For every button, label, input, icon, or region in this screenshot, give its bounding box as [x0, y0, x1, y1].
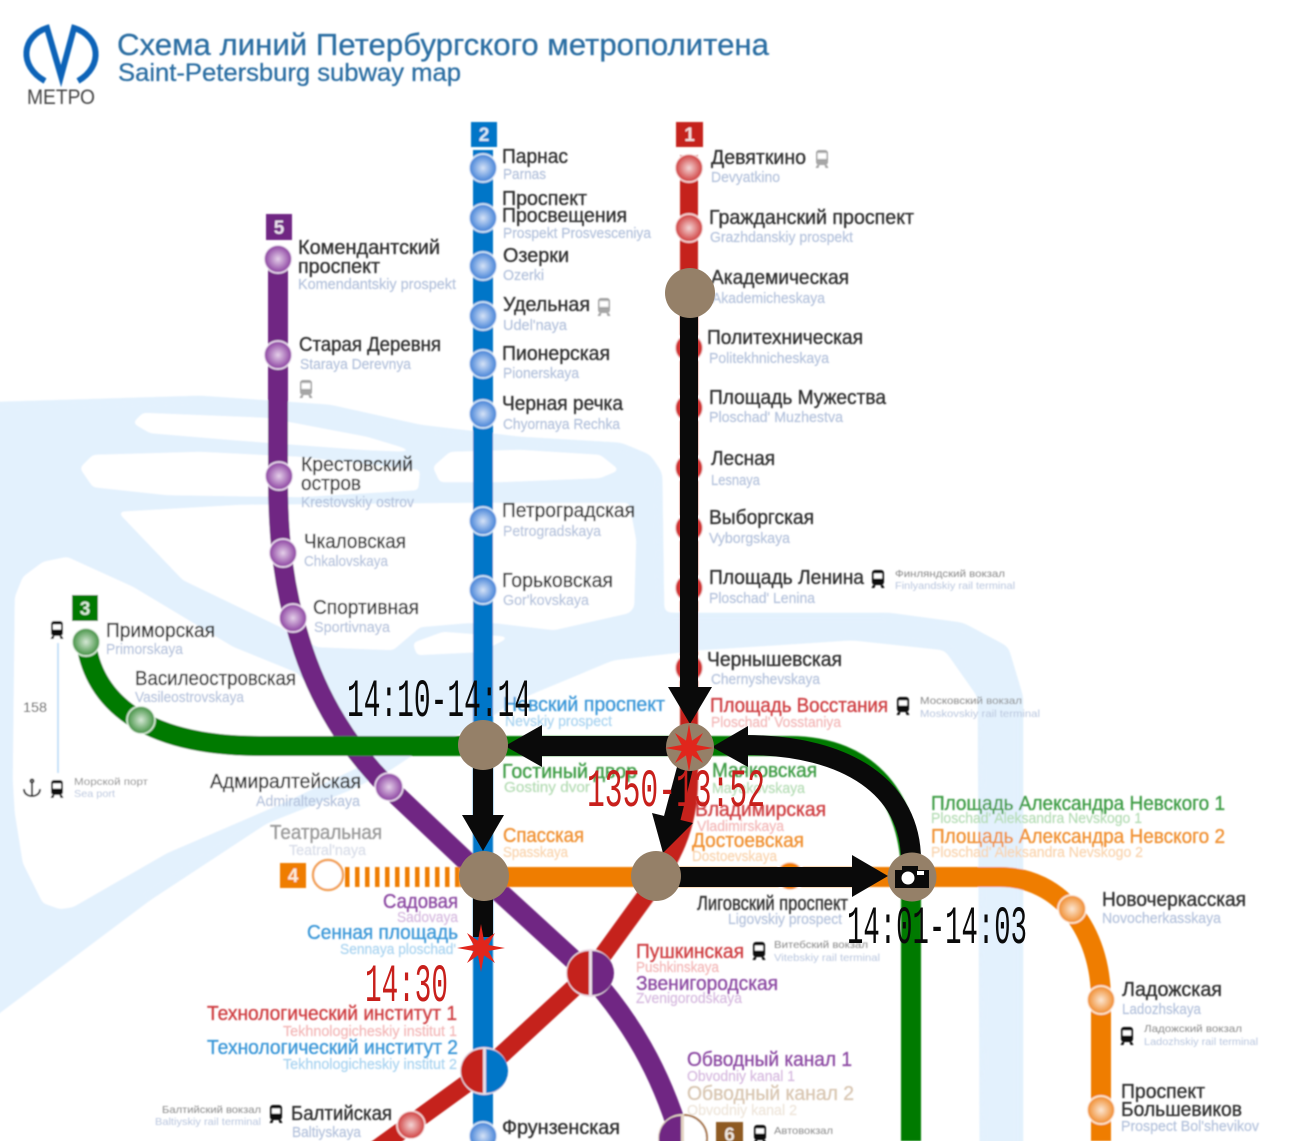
line 5 purple	[278, 258, 680, 1137]
sea port link	[57, 643, 59, 773]
island: thin lens	[133, 413, 417, 452]
Teatralnaya ring	[313, 860, 343, 890]
island: right of line 2	[433, 450, 619, 482]
label: Obvodny kanal 1	[687, 1049, 852, 1085]
label: Tekhnologichesky institut 1: Tekhnologicheskiy institut 1	[283, 1023, 457, 1040]
label: Pushkinskaya: Пушкинская	[636, 941, 744, 963]
label: Grazhdansky prospekt: Grazhdanskiy prospekt	[710, 229, 854, 246]
subtitle: Saint-Petersburg subway map	[118, 59, 461, 87]
label: Krestovsky ostrov: остров	[301, 473, 361, 495]
label: Baltic rail terminal: Baltiyskiy rail terminal	[155, 1116, 261, 1128]
label: Sennaya ploshchad: Sennaya ploschad'	[340, 941, 456, 958]
label: Lesnaya: Лесная	[711, 448, 775, 470]
star: Sennaya incident	[457, 924, 505, 972]
label: Novocherkasskaya	[1102, 889, 1246, 927]
label: Devyatkino	[711, 147, 806, 186]
badge 3: 3	[80, 599, 90, 620]
label: Dostoevskaya: Достоевская	[692, 830, 804, 852]
island: Krestovsky	[80, 452, 420, 497]
label: Sportivnaya: Sportivnaya	[314, 619, 391, 636]
label: Vitebsk rail terminal: Vitebskiy rail terminal	[774, 952, 880, 964]
label: Udelnaya	[503, 294, 590, 334]
label: Teatralnaya: Театральная	[270, 822, 382, 844]
line 1 stations under route	[675, 334, 703, 682]
label: Pushkinskaya: Pushkinskaya	[636, 959, 720, 976]
label: Mayakovskaya: Маяковская	[712, 760, 817, 782]
label: Staraya Derevnya: Staraya Derevnya	[300, 356, 412, 373]
label: Parnas: Parnas	[503, 166, 546, 183]
label: Vyborgskaya: Vyborgskaya	[709, 530, 791, 547]
icon: Finland station	[872, 570, 884, 588]
label: Prospekt Prosvescheniya: Проспект	[502, 188, 587, 210]
Ligovsky station	[776, 862, 804, 890]
label: Admiralteyskaya: Admiralteyskaya	[256, 793, 361, 810]
badge 6	[716, 1122, 743, 1141]
islands	[13, 413, 636, 909]
route overlay	[347, 268, 1027, 1018]
label: Sadovaya: Садовая	[383, 891, 458, 913]
interchange: Obvodny kanal	[658, 1114, 707, 1141]
label: Sennaya ploshchad: Сенная площадь	[307, 922, 458, 944]
logo mark	[26, 28, 96, 81]
label: Politekhnicheskaya: Политехническая	[707, 327, 863, 349]
icon: Staraya Derevnya rail	[300, 380, 312, 398]
label: Mayakovskaya	[712, 760, 817, 797]
arrow: Dostoevskaya to Aleksandra Nevskogo	[657, 855, 888, 897]
badge 2	[471, 122, 497, 147]
label: Devyatkino: Devyatkino	[711, 169, 780, 186]
label: Lesnaya	[711, 448, 775, 489]
star: Vosstaniya incident	[665, 724, 713, 772]
icon: Ladoga station	[1120, 1027, 1134, 1045]
label: Komendantsky prospekt: проспект	[298, 256, 380, 278]
interchange: Pushkinskaya Zvenigorodskaya	[566, 949, 614, 997]
label: Grazhdansky prospekt: Гражданский проспект	[709, 207, 914, 229]
arrow: Vosstaniya to Nevsky	[505, 725, 675, 767]
arrow: Aleksandra Nevskogo to Vosstaniya	[712, 726, 911, 877]
label: Novocherkasskaya: Novocherkasskaya	[1102, 910, 1222, 927]
label: Ladoga rail terminal: Ladozhskiy rail terminal	[1144, 1036, 1258, 1048]
label: Ligovsky prospekt: Ligovskiy prospect	[728, 911, 843, 928]
island: Vasilyevsky	[13, 557, 367, 909]
line 3 stations	[72, 628, 155, 734]
line 4 dashed section	[345, 867, 460, 887]
label: Tekhnologichesky institut 2: Технологический институт 2	[207, 1037, 458, 1059]
transfer node: Aleksandra Nevskogo	[888, 852, 936, 902]
label: Prospekt Prosvescheniya: Prospekt Prosvesceniya	[503, 225, 652, 242]
label: Ligovsky prospekt	[697, 893, 848, 928]
gulf and Neva river	[0, 396, 1023, 1141]
label: Obvodny kanal 2	[687, 1083, 854, 1119]
label: Nevsky prospekt: Nevskiy prospect	[505, 713, 613, 730]
label: Petrogradskaya	[502, 500, 635, 540]
label: Vyborgskaya: Выборгская	[709, 507, 814, 529]
label: Sportivnaya	[313, 597, 419, 636]
arrow: Nevsky to Sennaya direction	[462, 745, 504, 851]
icon: Avtovokzal bus	[754, 1125, 766, 1141]
logo	[26, 28, 96, 109]
label: Obvodny kanal 1: Obvodniy kanal 1	[687, 1068, 795, 1085]
label: Novocherkasskaya: Новочеркасская	[1102, 889, 1246, 911]
label: Ladoga rail terminal: Ладожский вокзал	[1144, 1023, 1242, 1035]
label: Tekhnologichesky institut 2: Tekhnologicheskiy institut 2	[283, 1056, 457, 1073]
label: Spasskaya: Spasskaya	[503, 844, 569, 861]
label: Parnas: Парнас	[502, 146, 568, 168]
label: Udelnaya: Удельная	[503, 294, 590, 316]
time: 14:01-14:03: 14:01-14:03	[847, 899, 1027, 960]
label: Zvenigorodskaya	[636, 973, 778, 1007]
interchange: Tekhnologichesky institut	[460, 1047, 508, 1095]
label: Vladimirskaya: Владимирская	[695, 799, 826, 821]
water background	[0, 396, 1023, 1141]
label: Sennaya ploshchad	[307, 922, 458, 958]
label: Chernyshevskaya	[707, 649, 842, 688]
label: Udelnaya: Udel'naya	[503, 317, 568, 334]
label: Zvenigorodskaya: Zvenigorodskaya	[636, 990, 743, 1007]
label: Baltic rail terminal	[155, 1104, 261, 1128]
label: Ploshchad Aleksandra Nevskogo 1: Ploschad' Aleksandra Nevskogo 1	[931, 810, 1142, 827]
label: Primorskaya: Primorskaya	[106, 641, 184, 658]
label: Teatralnaya: Teatral'naya	[289, 842, 367, 859]
label: Admiralteyskaya	[210, 771, 361, 810]
transfer node: Sadovaya	[459, 851, 509, 901]
icon: Devyatkino rail	[816, 150, 828, 168]
label: Politekhnicheskaya	[707, 327, 863, 367]
label: Finland rail terminal: Финляндский вокзал	[895, 568, 1005, 580]
label: Sadovaya	[383, 891, 459, 926]
label: Vitebsk rail terminal	[774, 939, 880, 964]
label: Krestovsky ostrov: Крестовский	[301, 454, 413, 476]
badge 1: 1	[684, 125, 695, 146]
badge 2: 2	[479, 125, 489, 146]
label: Ploshchad Vosstaniya: Площадь Восстания	[710, 695, 888, 717]
label: Ladozhskaya	[1122, 979, 1222, 1018]
label: Prospekt Bolshevikov: Проспект	[1121, 1081, 1205, 1103]
label: Finland rail terminal: Finlyandskiy rail terminal	[895, 580, 1015, 592]
label: Ozerki: Озерки	[503, 245, 569, 267]
label: Vyborgskaya	[709, 507, 814, 547]
label: Baltiyskaya: Балтийская	[291, 1103, 392, 1125]
label: Ladozhskaya: Ладожская	[1122, 979, 1222, 1001]
label: Primorskaya: Приморская	[106, 620, 215, 642]
label: Tekhnologichesky institut 2	[207, 1037, 458, 1073]
label: Ploshchad Aleksandra Nevskogo 1	[931, 793, 1225, 827]
icon: camera	[895, 866, 929, 888]
label: Moscow rail terminal: Moskovskiy rail terminal	[920, 708, 1040, 720]
label: Ploshchad Lenina: Ploschad' Lenina	[709, 590, 816, 607]
title: Схема линий Петербургского метрополитена	[117, 27, 770, 62]
label: Ploshchad Aleksandra Nevskogo 2	[931, 826, 1225, 861]
label: Avtovokzal: Автовокзал	[774, 1125, 833, 1137]
label: Chkalovskaya: Chkalovskaya	[304, 553, 389, 570]
arrow: Akademicheskaya to Ploshchad Vosstaniya	[668, 293, 712, 724]
label: Prospekt Bolshevikov: Prospect Bol'shevikov	[1121, 1118, 1259, 1135]
label: Ploshchad Muzhestva: Ploschad' Muzhestva	[709, 409, 844, 426]
label: Chernaya Rechka	[502, 393, 624, 433]
label: Vitebsk rail terminal: Витебский вокзал	[774, 939, 868, 951]
line 1 red	[375, 155, 689, 1141]
label: Ploshchad Muzhestva	[709, 387, 887, 426]
label: Pionerskaya	[502, 343, 610, 382]
label: Ploshchad Vosstaniya: Ploschad' Vosstaniya	[711, 714, 842, 731]
label: Gorkovskaya: Горьковская	[502, 570, 613, 592]
label: Baltic rail terminal: Балтийский вокзал	[162, 1104, 261, 1116]
badge 3	[72, 595, 98, 621]
badge 4: 4	[288, 866, 299, 887]
arrow: down from Spasskaya to Sennaya	[473, 877, 493, 937]
icon: anchor	[24, 780, 40, 796]
label: Pionerskaya: Pionerskaya	[503, 365, 580, 382]
label: Ploshchad Aleksandra Nevskogo 2: Площадь Александра Невского 2	[931, 826, 1225, 848]
label: Lesnaya: Lesnaya	[711, 472, 761, 489]
label: Ligovsky prospekt: Лиговский проспект	[697, 893, 848, 915]
icon: sea port bus	[50, 780, 64, 798]
line 5 stations	[264, 245, 403, 801]
label: Obvodny kanal 2: Обводный канал 2	[687, 1083, 854, 1105]
arrow: Vosstaniya to Dostoevskaya	[652, 748, 697, 853]
label: Akademicheskaya: Akademicheskaya	[712, 290, 826, 307]
label: Chernyshevskaya: Chernyshevskaya	[711, 671, 821, 688]
label: Teatralnaya	[270, 822, 382, 859]
line badges	[72, 122, 743, 1141]
label: Spasskaya: Спасская	[503, 825, 584, 847]
label: Sportivnaya: Спортивная	[313, 597, 419, 619]
icon: Primorskaya bus	[50, 621, 64, 639]
transfer node: Dostoevskaya	[631, 851, 681, 901]
label: Primorskaya	[106, 620, 215, 658]
label: Chkalovskaya: Чкаловская	[304, 531, 406, 553]
time: 1350-13:52: 1350-13:52	[587, 762, 765, 823]
label: Petrogradskaya: Петроградская	[502, 500, 635, 522]
label: Vasileostrovskaya: Василеостровская	[135, 668, 296, 690]
label: Ploshchad Muzhestva: Площадь Мужества	[709, 387, 887, 409]
icon: Vitebsk station	[752, 942, 766, 960]
label: Obvodny kanal 2: Obvodniy kanal 2	[687, 1102, 797, 1119]
label: Tekhnologichesky institut 1: Технологический институт 1	[207, 1003, 457, 1025]
label: Prospekt Bolshevikov	[1121, 1081, 1259, 1135]
label: Ploshchad Lenina: Площадь Ленина	[709, 567, 865, 589]
rail icons	[24, 150, 1134, 1141]
label: Devyatkino: Девяткино	[711, 147, 806, 169]
label: Krestovsky ostrov	[301, 454, 414, 511]
label: Gostiny dvor	[502, 761, 637, 796]
label: Prospekt Bolshevikov: Большевиков	[1121, 1099, 1242, 1121]
label: Parnas	[502, 146, 568, 183]
label: Petrogradskaya: Petrogradskaya	[503, 523, 602, 540]
label: Baltiyskaya	[291, 1103, 392, 1141]
time: 14:10-14:14: 14:10-14:14	[347, 672, 531, 733]
badge 5	[266, 214, 292, 240]
label: Nevsky prospekt	[503, 694, 665, 730]
label: Chernaya Rechka: Chyornaya Rechka	[503, 416, 621, 433]
label: Akademicheskaya	[711, 267, 849, 307]
label: Frunzenskaya: Фрунзенская	[502, 1117, 620, 1139]
logo word: МЕТРО	[27, 86, 95, 109]
icon: Udelnaya rail	[598, 298, 610, 316]
label: Gostiny dvor: Гостиный двор	[502, 761, 637, 783]
label: Akademicheskaya: Академическая	[711, 267, 849, 289]
label: Vladimirskaya	[695, 799, 826, 835]
label: Vasileostrovskaya	[135, 668, 296, 706]
label: Chernyshevskaya: Чернышевская	[707, 649, 842, 671]
label: Finland rail terminal	[895, 568, 1015, 592]
label: Komendantsky prospekt	[298, 237, 457, 293]
line 2 blue	[473, 150, 493, 1141]
line 2 stations	[469, 154, 497, 1141]
label: Mayakovskaya: Mayakovskaya	[712, 780, 806, 797]
icon: Moscow station	[896, 697, 910, 715]
icon: Baltic station	[270, 1105, 282, 1123]
label: Chernaya Rechka: Черная речка	[502, 393, 624, 415]
label: Ploshchad Aleksandra Nevskogo 2: Ploschad' Aleksandra Nevskogo 2	[931, 844, 1143, 861]
island: small lens	[413, 632, 510, 655]
label: Vladimirskaya: Vladimirskaya	[697, 818, 785, 835]
label: Komendantsky prospekt: Комендантский	[298, 237, 440, 259]
label: Grazhdansky prospekt	[709, 207, 914, 246]
label: Ladoga rail terminal	[1144, 1023, 1258, 1048]
label: Ozerki: Ozerki	[503, 267, 544, 284]
time: 14:30: 14:30	[365, 957, 448, 1018]
label: Vasileostrovskaya: Vasileostrovskaya	[135, 689, 245, 706]
label: Gorkovskaya: Gor'kovskaya	[503, 592, 590, 609]
label: Sea port: Sea port	[74, 788, 115, 800]
label: Prospekt Prosvescheniya	[502, 188, 652, 242]
label: Krestovsky ostrov: Krestovskiy ostrov	[301, 494, 414, 511]
label: travel time 158: 158	[23, 699, 47, 715]
transfer node: Akademicheskaya	[665, 268, 715, 318]
label: Chkalovskaya	[304, 531, 406, 570]
line 4 orange	[460, 877, 1101, 1141]
label: Sea port: Морской порт	[74, 776, 148, 788]
label: Moscow rail terminal	[920, 695, 1040, 720]
stations	[72, 154, 1115, 1141]
label: Ozerki	[503, 245, 569, 284]
transfer node: Vosstaniya	[666, 723, 714, 771]
label: Ploshchad Aleksandra Nevskogo 1: Площадь Александра Невского 1	[931, 793, 1225, 815]
label: Ladozhskaya: Ladozhskaya	[1122, 1001, 1202, 1018]
label: Zvenigorodskaya: Звенигородская	[636, 973, 778, 995]
badge 4	[280, 863, 306, 888]
line 3 green	[86, 642, 911, 1141]
line 4 stations	[1058, 895, 1115, 1124]
label: Baltiyskaya: Baltiyskaya	[292, 1124, 362, 1141]
badge 1	[676, 122, 703, 147]
label: Admiralteyskaya: Адмиралтейская	[210, 771, 361, 793]
label: Spasskaya	[503, 825, 584, 861]
label: Obvodny kanal 1: Обводный канал 1	[687, 1049, 852, 1071]
label: Ploshchad Vosstaniya	[710, 695, 888, 731]
label: Pushkinskaya	[636, 941, 744, 976]
label: Prospekt Prosvescheniya: Просвещения	[502, 205, 627, 227]
label: Dostoevskaya: Dostoevskaya	[692, 848, 778, 865]
label: Pionerskaya: Пионерская	[502, 343, 610, 365]
label: Politekhnicheskaya: Politekhnicheskaya	[709, 350, 830, 367]
label: Komendantsky prospekt: Komendantskiy prospekt	[298, 276, 457, 293]
label: Nevsky prospekt: Невский проспект	[503, 694, 665, 716]
badge 5: 5	[274, 218, 285, 239]
label: Ploshchad Lenina	[709, 567, 865, 607]
label: Gostiny dvor: Gostiny dvor	[504, 779, 590, 796]
label: Gorkovskaya	[502, 570, 613, 609]
island: Petrograd side	[118, 503, 636, 650]
line 1 stations	[397, 154, 703, 1139]
label: Moscow rail terminal: Московский вокзал	[920, 695, 1022, 707]
label: Dostoevskaya	[692, 830, 804, 865]
label: Staraya Derevnya	[299, 334, 441, 373]
transfer node: Nevsky	[458, 720, 508, 770]
label: Tekhnologichesky institut 1	[207, 1003, 457, 1040]
label: Sadovaya: Sadovaya	[397, 909, 459, 926]
label: Sea port	[74, 776, 148, 800]
label: Staraya Derevnya: Старая Деревня	[299, 334, 441, 356]
